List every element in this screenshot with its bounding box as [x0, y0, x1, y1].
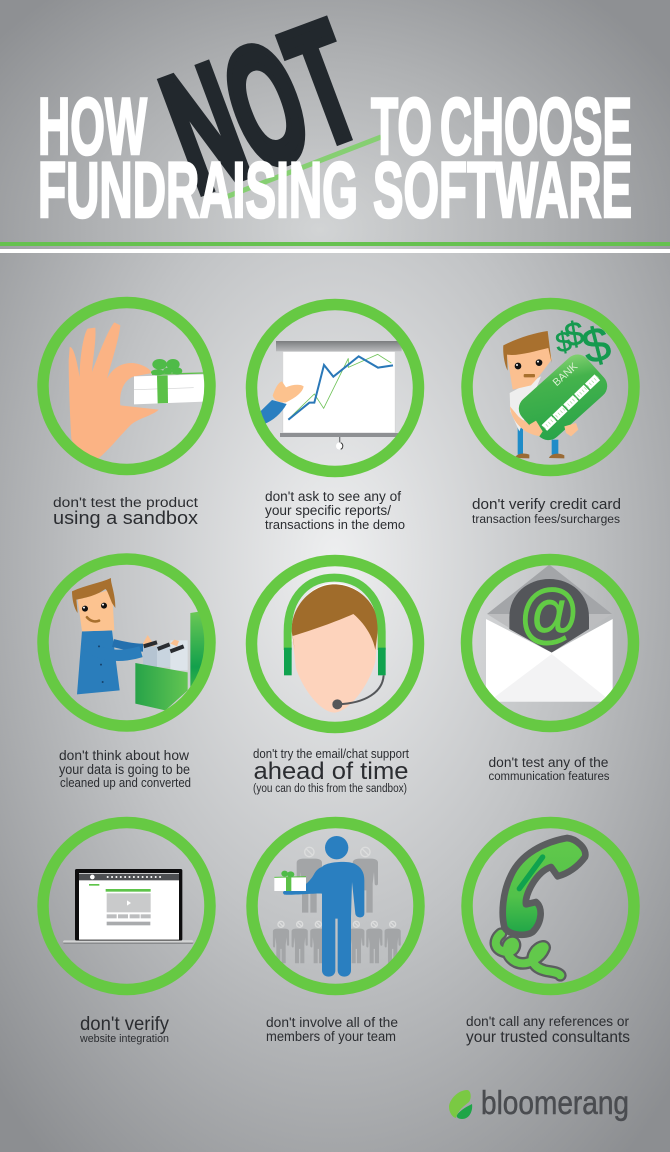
ring [252, 560, 418, 728]
icon: man holding bank card: $ [577, 316, 616, 375]
caption: don't verify credit card [472, 497, 621, 513]
icon: presentation screen with line chart [259, 341, 402, 450]
caption: your data is going to be [59, 762, 190, 777]
icon: bloomerang leaf mark [449, 1090, 472, 1119]
title: FUNDRAISING [38, 145, 358, 234]
caption: don't ask to see any of [265, 489, 401, 504]
panel: team involvement [252, 822, 419, 1044]
caption: ahead of time [254, 758, 408, 785]
ring [252, 304, 418, 472]
caption: your specific reports/ [265, 503, 391, 518]
caption [472, 497, 621, 526]
panel: references [466, 822, 634, 1046]
title: TO [371, 82, 432, 172]
icon: man holding bank card: BANK [551, 361, 580, 389]
caption [488, 755, 610, 783]
caption: don't test any of the [488, 755, 608, 770]
caption [266, 1015, 398, 1044]
green header rule [0, 242, 670, 246]
ring [467, 822, 634, 990]
main background [0, 253, 670, 1152]
caption: members of your team [266, 1029, 396, 1044]
icon: laptop [63, 869, 193, 944]
icon: envelope with at sign [486, 565, 613, 702]
icon: envelope with at sign: @ [518, 577, 580, 651]
logo: bloomerang: bloomerang [481, 1084, 629, 1121]
caption: don't call any references or [466, 1014, 630, 1029]
caption [53, 495, 199, 528]
caption: don't try the email/chat support [253, 747, 409, 761]
caption: website integration [79, 1033, 169, 1045]
icon: man holding bank card [503, 315, 616, 458]
caption: don't involve all of the [266, 1015, 398, 1030]
caption: transactions in the demo [265, 517, 405, 532]
icon: man filing documents [72, 578, 209, 710]
ring [466, 560, 634, 726]
icon: man holding bank card: $ [553, 325, 574, 359]
panel: credit card fees [467, 304, 634, 526]
title: HOW [38, 82, 147, 172]
caption [59, 747, 191, 790]
panel: reports demo [252, 304, 418, 532]
caption [265, 489, 405, 532]
white header rule [0, 249, 670, 253]
icon: head with headset [284, 578, 386, 713]
ring [43, 302, 210, 470]
title [38, 0, 632, 234]
caption [79, 1014, 169, 1045]
panel: sandbox [43, 302, 210, 528]
icon: person with gift and crossed-out team [273, 836, 401, 977]
caption: transaction fees/surcharges [472, 514, 620, 526]
caption: your trusted consultants [466, 1029, 630, 1046]
panel: communication features [466, 560, 634, 783]
header background [0, 0, 670, 253]
ring [252, 822, 419, 990]
icon: hand holding gift [69, 322, 204, 459]
ring [43, 559, 210, 726]
caption: don't think about how [59, 747, 190, 763]
panel: support [252, 560, 418, 795]
caption [466, 1014, 630, 1046]
caption: don't test the product [53, 495, 198, 510]
caption: don't verify [80, 1014, 169, 1035]
caption: cleaned up and converted [60, 776, 191, 790]
ring [467, 304, 634, 470]
caption: (you can do this from the sandbox) [253, 783, 407, 795]
caption: communication features [488, 771, 610, 783]
caption: using a sandbox [53, 507, 199, 528]
icon: man holding bank card: $ [562, 315, 587, 355]
caption [253, 747, 409, 795]
icon: telephone handset [496, 838, 585, 975]
panel: data conversion [43, 559, 210, 790]
panel: website integration [43, 822, 210, 1045]
ring [43, 822, 210, 990]
